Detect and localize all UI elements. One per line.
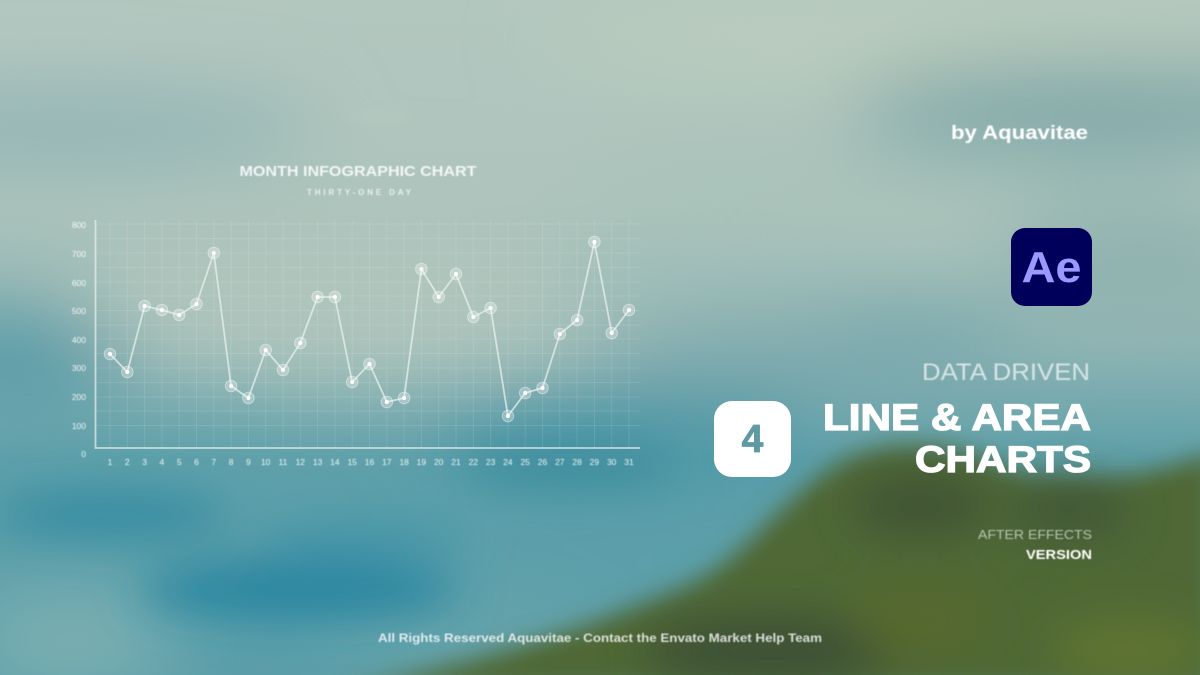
x axis labels: 6 bbox=[194, 457, 199, 467]
x axis labels: 12 bbox=[296, 457, 305, 467]
chart subtitle: THIRTY-ONE DAY bbox=[307, 188, 412, 197]
y axis labels: 100 bbox=[72, 421, 86, 431]
x axis labels: 4 bbox=[160, 457, 165, 467]
x axis labels: 28 bbox=[572, 457, 582, 467]
x axis labels: 18 bbox=[399, 457, 409, 467]
y axis labels bbox=[72, 220, 86, 459]
x axis labels: 23 bbox=[486, 457, 496, 467]
text: data driven: DATA DRIVEN bbox=[922, 359, 1090, 386]
y axis labels: 200 bbox=[72, 392, 86, 402]
x axis labels: 8 bbox=[229, 457, 234, 467]
heading: line and area charts: CHARTS bbox=[915, 439, 1091, 480]
x axis labels: 9 bbox=[246, 457, 251, 467]
y axis labels: 800 bbox=[72, 220, 86, 230]
x axis labels: 17 bbox=[382, 457, 392, 467]
y axis labels: 500 bbox=[72, 306, 86, 316]
x axis labels: 29 bbox=[590, 457, 599, 467]
y axis labels: 0 bbox=[81, 449, 86, 459]
x axis labels: 1 bbox=[108, 457, 113, 467]
x axis labels: 30 bbox=[607, 457, 617, 467]
x axis labels: 31 bbox=[624, 457, 634, 467]
icon: After Effects logo: Ae bbox=[1022, 243, 1082, 292]
chart grid bbox=[97, 220, 640, 448]
x axis labels: 16 bbox=[365, 457, 374, 467]
heading: line and area charts bbox=[823, 397, 1091, 480]
footer: copyright: All Rights Reserved Aquavitae - Contact the Envato Market Help Team bbox=[378, 631, 822, 645]
data line bbox=[110, 242, 629, 416]
data point centers bbox=[108, 240, 631, 418]
x axis labels: 21 bbox=[451, 457, 461, 467]
x axis labels bbox=[108, 457, 634, 467]
heading: line and area charts: LINE & AREA bbox=[823, 397, 1091, 438]
data point halos bbox=[104, 236, 635, 422]
x axis labels: 14 bbox=[330, 457, 340, 467]
x axis labels: 24 bbox=[503, 457, 513, 467]
x axis labels: 26 bbox=[538, 457, 547, 467]
y axis labels: 300 bbox=[72, 363, 86, 373]
x axis labels: 19 bbox=[417, 457, 426, 467]
x axis labels: 7 bbox=[211, 457, 216, 467]
y axis labels: 600 bbox=[72, 278, 86, 288]
x axis labels: 5 bbox=[177, 457, 182, 467]
chart title: MONTH INFOGRAPHIC CHART bbox=[240, 163, 476, 180]
icon: After Effects logo bbox=[1011, 228, 1092, 306]
chart axes bbox=[96, 220, 640, 448]
x axis labels: 25 bbox=[520, 457, 530, 467]
x axis labels: 13 bbox=[313, 457, 323, 467]
x axis labels: 2 bbox=[125, 457, 130, 467]
badge: number 4 bbox=[714, 401, 791, 477]
x axis labels: 27 bbox=[555, 457, 565, 467]
badge: number 4: 4 bbox=[742, 418, 764, 461]
faint ghost mark above chart bbox=[346, 109, 414, 125]
y axis labels: 700 bbox=[72, 249, 86, 259]
x axis labels: 3 bbox=[142, 457, 147, 467]
blurred green hill bbox=[345, 446, 1200, 675]
x axis labels: 10 bbox=[261, 457, 271, 467]
x axis labels: 11 bbox=[279, 457, 288, 467]
x axis labels: 22 bbox=[469, 457, 478, 467]
chart: month infographic line chart bbox=[72, 163, 640, 467]
y axis labels: 400 bbox=[72, 335, 86, 345]
text: version: VERSION bbox=[1026, 548, 1092, 562]
x axis labels: 20 bbox=[434, 457, 444, 467]
text: author credit: by Aquavitae bbox=[951, 123, 1088, 144]
text: after effects: AFTER EFFECTS bbox=[978, 527, 1092, 542]
x axis labels: 15 bbox=[347, 457, 357, 467]
